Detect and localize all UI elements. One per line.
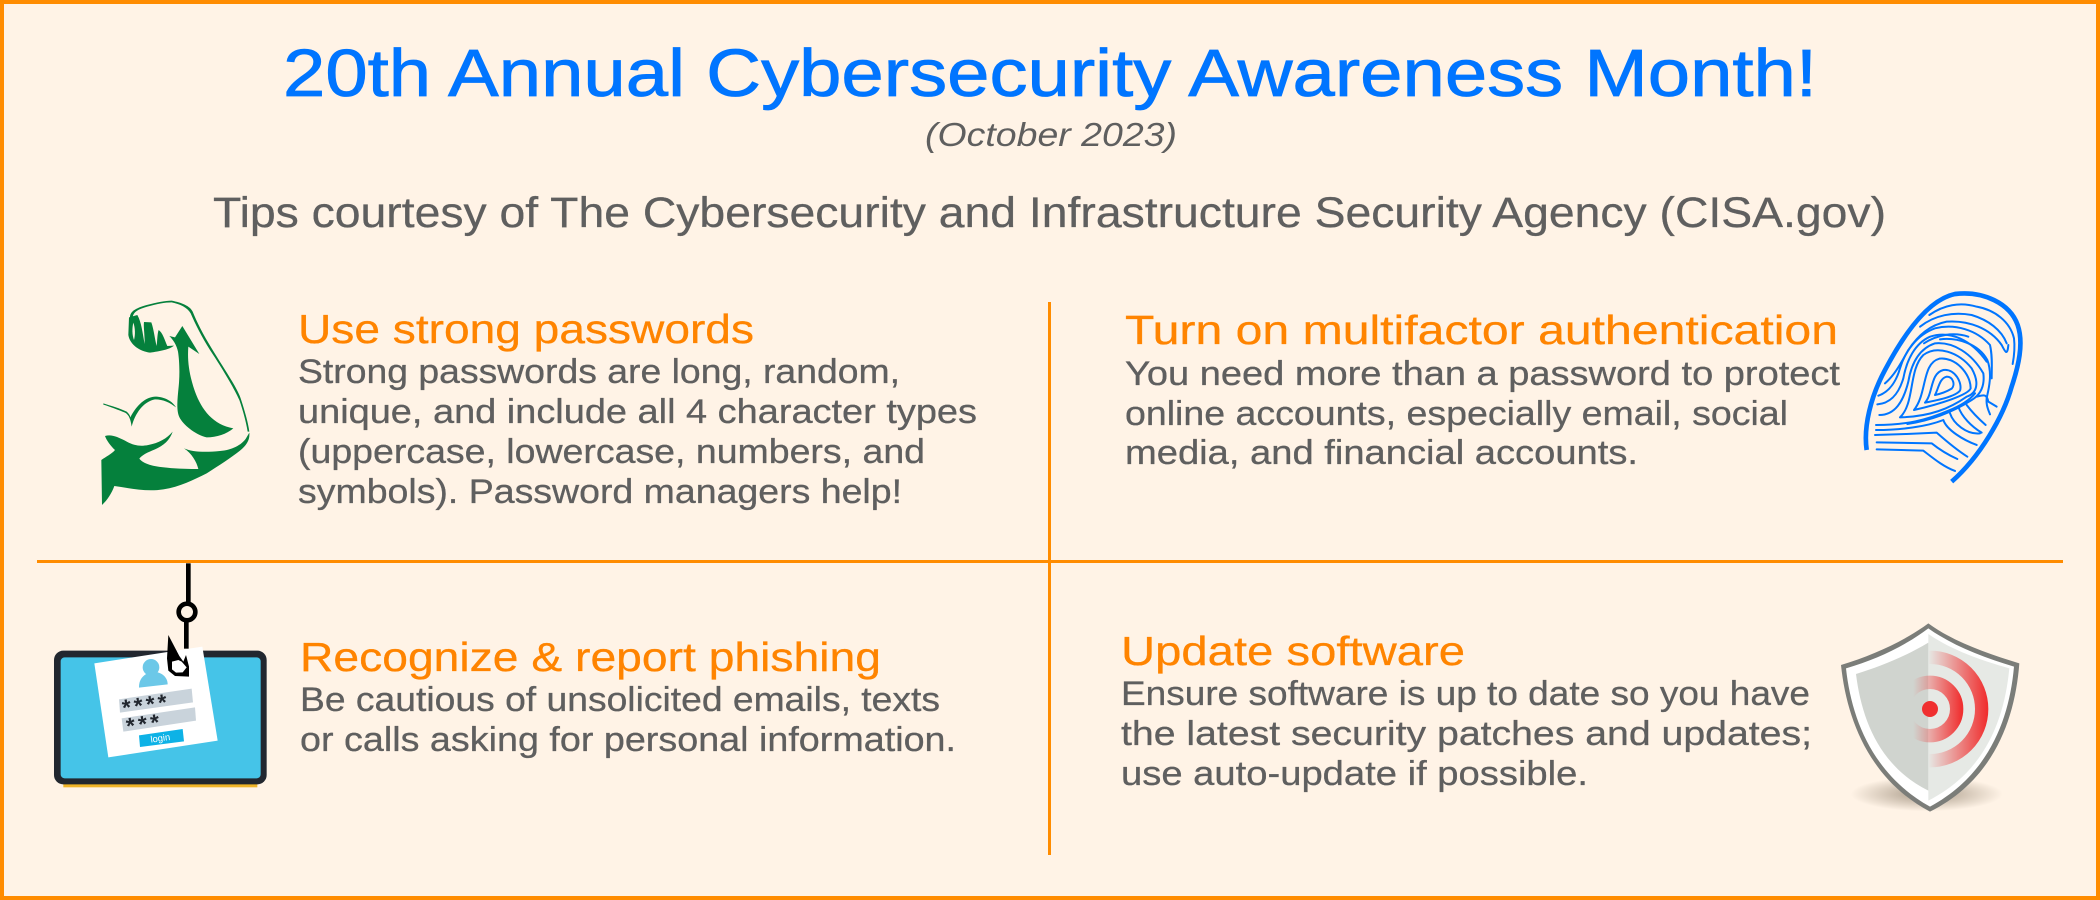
shield left half [1856,643,1928,791]
body text [1121,675,1812,793]
body text: media, and financial accounts. [1125,434,1638,472]
fishing hook [167,563,195,677]
body text: online accounts, especially email, social [1125,395,1788,433]
icon: flexed arm [101,301,249,505]
fist [128,315,174,353]
signal rings [1916,651,1988,767]
body text [298,353,977,511]
shield right half [1928,634,2009,801]
forearm and chest [101,432,249,505]
arrow muscle [169,326,233,437]
icon: fingerprint [1866,293,2020,482]
body text: Ensure software is up to date so you have [1121,675,1810,713]
arm outline [130,301,249,432]
body text: unique, and include all 4 character types [298,393,977,431]
panel: multifactor authentication [1125,293,2020,482]
body text: You need more than a password to protect [1125,355,1840,393]
fingerprint ridges [1875,304,2014,471]
heading: Update software [1121,628,1465,674]
body text [300,681,956,759]
body text [1125,355,1840,472]
tablet screen [61,657,261,778]
login page [94,647,218,757]
login page: **** [120,689,169,721]
bicep line [103,397,176,427]
body text: (uppercase, lowercase, numbers, and [298,433,925,471]
heading: Use strong passwords [298,306,754,352]
source line: Tips courtesy of The Cybersecurity and Infrastructure Security Agency (CISA.gov) [213,189,1886,237]
body text: Strong passwords are long, random, [298,353,900,391]
tablet [54,651,267,784]
panel: use strong passwords [101,301,977,511]
title: 20th Annual Cybersecurity Awareness Month! [283,36,1817,111]
shield frame [1841,623,2019,812]
shield shadow [1851,777,2003,811]
login page: login [150,732,171,745]
body text: Be cautious of unsolicited emails, texts [300,681,940,719]
fingerprint outline [1866,293,2020,482]
login page: *** [124,709,161,739]
date subtitle: (October 2023) [925,116,1177,153]
heading: Turn on multifactor authentication [1125,307,1838,353]
panel: update software [1121,623,2019,812]
body text: or calls asking for personal information. [300,721,956,759]
heading: Recognize & report phishing [300,634,881,680]
body text: use auto-update if possible. [1121,755,1588,793]
body text: symbols). Password managers help! [298,473,902,511]
body text: the latest security patches and updates; [1121,715,1812,753]
panel: report phishing [54,563,956,787]
tablet shadow [63,783,257,787]
icon: phishing hook and tablet [54,563,267,787]
icon: shield [1841,623,2019,812]
